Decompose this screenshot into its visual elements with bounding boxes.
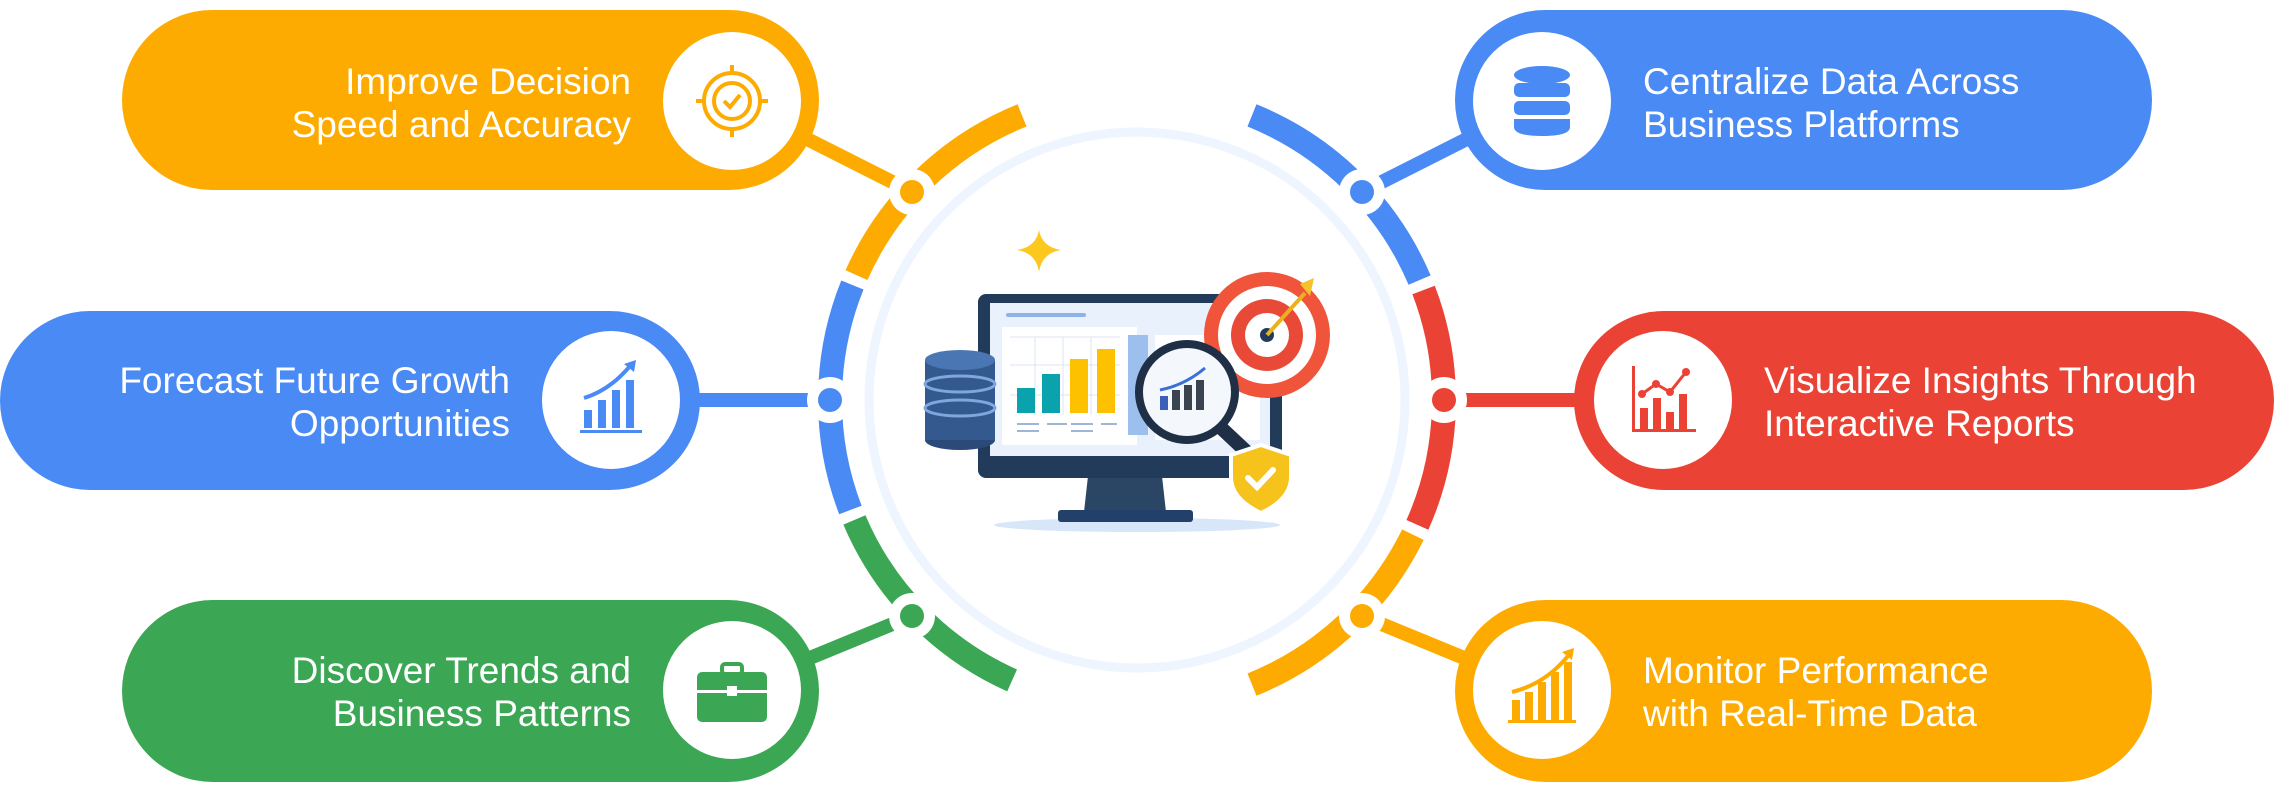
- panel: monitor performance: with Real-Time Data: [1642, 693, 1977, 734]
- connector lines: [611, 101, 1663, 690]
- panel: forecast: Opportunities: [290, 403, 510, 444]
- panel: improve decision: Speed and Accuracy: [292, 104, 631, 145]
- panel: visualize insights: [1574, 311, 2274, 490]
- icon: database: [1514, 66, 1570, 136]
- monitor body: [978, 294, 1282, 478]
- panel: centralize data: Business Platforms: [1643, 104, 1960, 145]
- panel: forecast: Forecast Future Growth: [119, 360, 510, 401]
- panel: improve decision: [122, 10, 819, 190]
- monitor stand: [1084, 476, 1166, 512]
- panel: improve decision: Improve Decision: [345, 61, 631, 102]
- icon: report chart: [1632, 366, 1696, 432]
- chart panel: [1002, 327, 1137, 445]
- icon: performance chart: [1508, 648, 1576, 723]
- panel: monitor performance: [1455, 600, 2152, 782]
- central illustration: analytics monitor: [925, 230, 1330, 532]
- panel: centralize data: [1455, 10, 2152, 190]
- icon: target check: [696, 65, 768, 137]
- panel: discover trends: Business Patterns: [333, 693, 631, 734]
- ring nodes: [807, 169, 1467, 639]
- panel: centralize data: Centralize Data Across: [1643, 61, 2019, 102]
- panel: discover trends: [122, 600, 819, 782]
- icon: briefcase: [697, 664, 767, 722]
- shield: [1231, 445, 1291, 513]
- sparkle: [1017, 230, 1061, 272]
- icon: growth chart: [580, 360, 642, 433]
- panel: forecast: [0, 311, 700, 490]
- database icon: [925, 350, 995, 450]
- panel: visualize insights: Interactive Reports: [1764, 403, 2075, 444]
- panel: visualize insights: Visualize Insights Through: [1764, 360, 2197, 401]
- inner light circle: [869, 132, 1405, 668]
- ring arcs: [830, 115, 1444, 685]
- magnifier: [1139, 344, 1250, 455]
- target: [1204, 272, 1330, 398]
- panel: monitor performance: Monitor Performance: [1643, 650, 1988, 691]
- panel: discover trends: Discover Trends and: [292, 650, 631, 691]
